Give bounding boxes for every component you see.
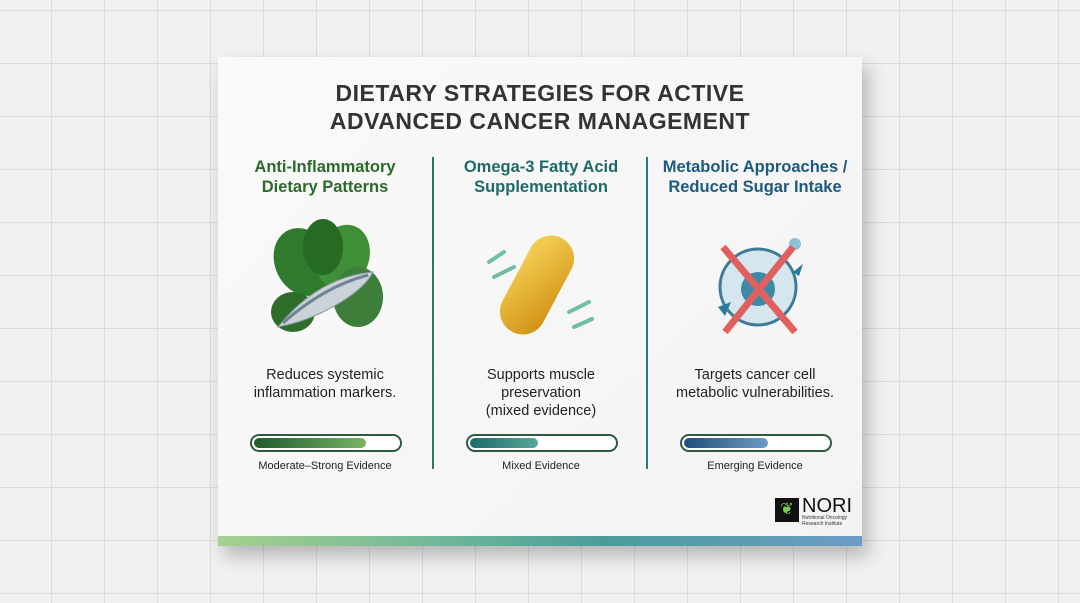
icon: greens and fish — [271, 219, 383, 332]
description: Supports muscle — [487, 367, 595, 383]
panel: omega-3 — [464, 158, 618, 472]
title: ADVANCED CANCER MANAGEMENT — [330, 108, 750, 134]
description: metabolic vulnerabilities. — [676, 385, 834, 401]
description — [486, 367, 596, 419]
heading: Metabolic Approaches / — [663, 158, 847, 176]
evidence bar — [466, 434, 618, 452]
logo: NORI — [802, 495, 852, 517]
logo — [775, 495, 852, 527]
logo: ❦ — [780, 501, 794, 518]
heading: Supplementation — [474, 178, 608, 196]
card — [218, 57, 862, 546]
evidence bar — [250, 434, 402, 452]
description: Reduces systemic — [266, 367, 384, 383]
logo: Nutritional Oncology — [802, 515, 847, 521]
description — [254, 367, 396, 401]
heading: Dietary Patterns — [262, 178, 388, 196]
evidence bar — [680, 434, 832, 452]
evidence label: Emerging Evidence — [707, 460, 803, 472]
panel: metabolic — [663, 158, 848, 472]
logo: Research Institute — [802, 521, 842, 527]
description: inflammation markers. — [254, 385, 396, 401]
heading: Anti-Inflammatory — [254, 158, 396, 176]
heading — [663, 158, 848, 196]
heading — [254, 158, 396, 196]
heading: Reduced Sugar Intake — [668, 178, 842, 196]
icon: crossed cell — [718, 238, 803, 334]
icon: capsule — [486, 236, 594, 334]
heading: Omega-3 Fatty Acid — [464, 158, 618, 176]
heading — [464, 158, 618, 196]
description: Targets cancer cell — [695, 367, 815, 383]
description: (mixed evidence) — [486, 403, 596, 419]
panel: anti-inflammatory — [250, 158, 402, 472]
description — [676, 367, 834, 401]
evidence label: Moderate–Strong Evidence — [258, 460, 392, 472]
title: DIETARY STRATEGIES FOR ACTIVE — [336, 80, 744, 106]
description: preservation — [501, 385, 581, 401]
title — [330, 80, 750, 134]
evidence label: Mixed Evidence — [502, 460, 580, 472]
